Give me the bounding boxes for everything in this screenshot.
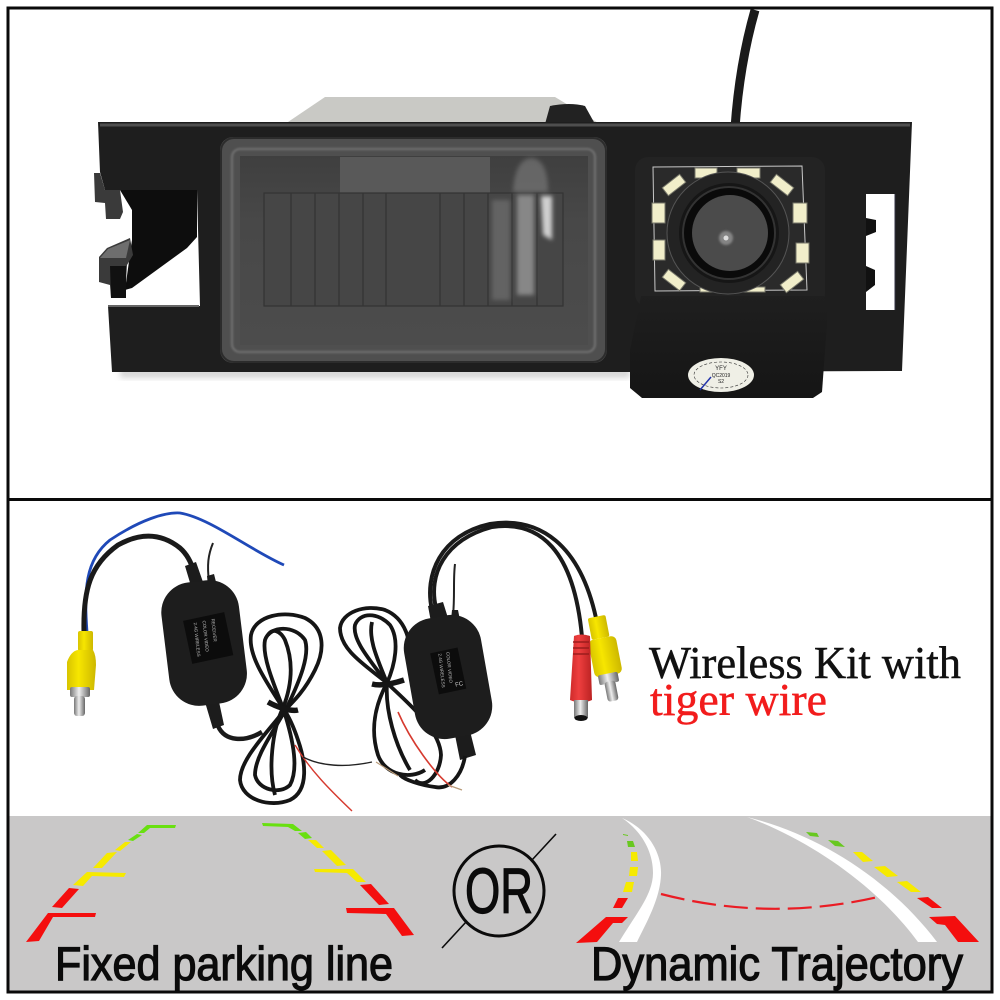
fixed parking line graphic — [26, 823, 414, 942]
right mounting window — [866, 194, 895, 310]
receiver label: COLOR VIDEO — [445, 652, 454, 684]
lamp ribs — [264, 193, 563, 306]
yellow RCA plug — [67, 631, 96, 716]
receiver label: 2.4G WIRELESS — [437, 653, 446, 688]
soft plate shadow — [120, 368, 630, 378]
receiver label — [430, 648, 466, 694]
licence lamp lens — [220, 137, 607, 363]
kit two: receiver — [340, 523, 628, 790]
strain reliefs — [428, 602, 476, 760]
white LEDs — [652, 168, 809, 293]
date sticker: QC2019 — [712, 373, 731, 379]
yellow RCA plug — [584, 614, 628, 704]
kit one: transmitter — [67, 513, 372, 811]
dynamic trajectory graphic — [576, 817, 979, 943]
caption: wireless kit: Wireless Kit with — [649, 637, 961, 688]
panel divider line — [8, 498, 992, 501]
camera lens — [667, 172, 789, 294]
date sticker — [688, 358, 754, 392]
label: fixed parking line: Fixed parking line — [55, 937, 393, 990]
LED circuit board — [653, 166, 807, 291]
red wire tail — [398, 712, 452, 787]
OR badge: OR — [465, 855, 533, 927]
caption: wireless kit: tiger wire — [650, 674, 827, 725]
receiver label: FC — [455, 681, 465, 689]
OR badge — [442, 834, 556, 948]
black wire tail — [303, 757, 372, 765]
red wire tail — [295, 745, 352, 811]
cable to coil — [218, 726, 262, 739]
licence plate housing — [98, 122, 912, 372]
video cable — [84, 536, 194, 632]
caption: wireless kit — [649, 637, 961, 725]
camera lower body — [630, 296, 828, 398]
panel: wireless kit photo — [8, 501, 992, 816]
rear bracket behind plate — [285, 97, 600, 124]
receiver box — [399, 610, 497, 744]
blue power wire — [86, 513, 284, 632]
label: dynamic trajectory: Dynamic Trajectory — [591, 937, 963, 990]
date sticker: YFY — [715, 366, 727, 372]
rear-view camera — [630, 157, 828, 398]
strain reliefs — [185, 562, 224, 729]
date sticker: S2 — [718, 379, 724, 385]
transmitter label: 2.4G WIRELESS — [193, 622, 201, 657]
coiled cable — [340, 608, 465, 787]
panel: camera product photo — [8, 8, 992, 499]
twin video cable — [430, 523, 596, 637]
camera body top — [635, 157, 825, 307]
mounting clips — [94, 173, 199, 306]
coiled cable — [240, 614, 322, 803]
panel: parking guide options — [8, 816, 992, 991]
housing top edge highlight — [100, 124, 910, 126]
transmitter label: COLOR VIDEO — [202, 620, 210, 652]
transmitter box — [158, 577, 250, 709]
transmitter label — [183, 612, 233, 664]
camera cable — [735, 10, 755, 128]
antenna wire — [208, 543, 213, 582]
copper ends — [376, 762, 462, 790]
lens reflections — [492, 158, 552, 300]
cable grommet — [545, 104, 595, 124]
red DC plug — [570, 634, 592, 721]
antenna wire — [453, 564, 455, 616]
transmitter label: RECEIVER — [210, 618, 218, 643]
